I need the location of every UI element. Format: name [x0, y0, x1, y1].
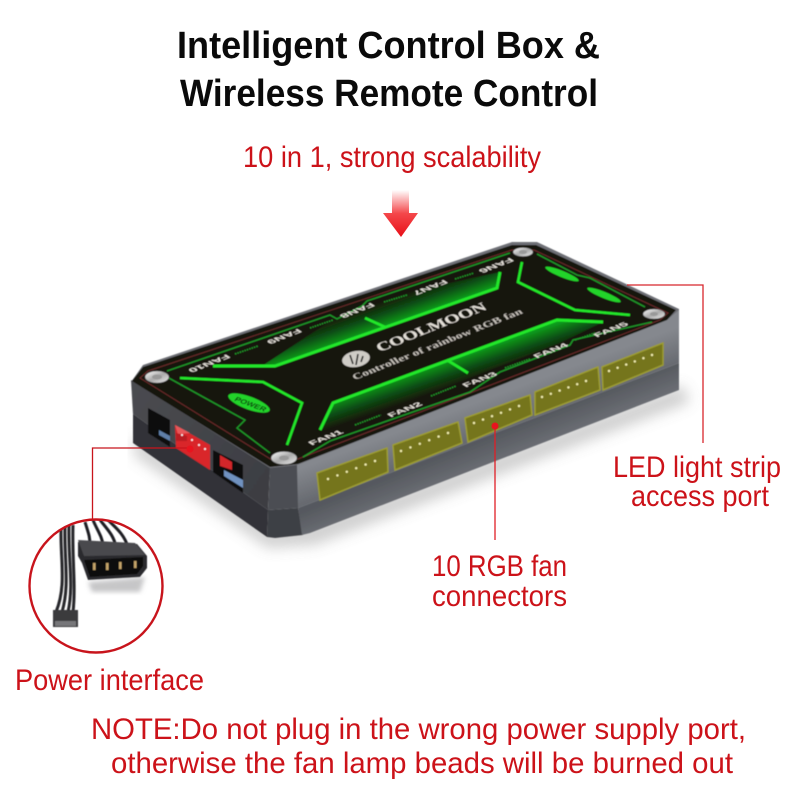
callout line: RGB fan connectors: [492, 422, 498, 540]
device front face: [297, 310, 679, 535]
green pill: POWER: [226, 389, 272, 417]
green pill: POWER: POWER: [233, 396, 269, 413]
molex connector: [78, 540, 147, 580]
callout label: Power interface: Power interface: [15, 664, 204, 697]
arrow: down to control box: [383, 190, 418, 237]
device top panel: [132, 245, 676, 467]
title: [177, 25, 600, 115]
fan labels top row: FAN7: [410, 279, 450, 296]
port: red power connector: [175, 425, 210, 470]
title: Wireless Remote Control: [180, 73, 598, 115]
screw: bottom: [271, 452, 297, 464]
callout label: 10 RGB fan connectors: [432, 550, 567, 613]
fan labels bottom row: FAN4: [531, 342, 572, 359]
subtitle: 10 in 1, strong scalability: 10 in 1, strong scalability: [243, 141, 541, 174]
port: black USB socket left: [148, 408, 170, 447]
fan labels top row: FAN10: [186, 353, 232, 373]
control box device: [131, 242, 690, 548]
connector 5: [602, 343, 663, 390]
bright green circuit lines: [180, 262, 630, 445]
callout label: 10 RGB fan connectors: 10 RGB fan: [432, 550, 567, 583]
small white plug: [53, 610, 78, 627]
fan labels bottom row: FAN5: [591, 321, 631, 338]
screw: top: [513, 248, 533, 256]
brand name: COOLMOON: COOLMOON: [372, 300, 490, 355]
thin green outline: [167, 253, 652, 457]
connector 3: [465, 395, 532, 442]
dashed connector marks: [235, 273, 595, 425]
molex wires: [85, 520, 128, 547]
device left face: [131, 380, 303, 538]
callout line: LED strip port: [627, 285, 703, 443]
fan labels bottom row: FAN1: [306, 429, 346, 446]
connector 2: [393, 422, 462, 470]
brand logo: [341, 349, 371, 369]
green pill: LED 1: [544, 264, 580, 284]
device body top bevel: [131, 242, 679, 475]
fan labels top row: FAN9: [264, 328, 304, 345]
connector pins: [327, 354, 653, 480]
callout label: LED light strip access port: access port: [631, 480, 770, 513]
fan connectors row: [317, 343, 663, 500]
fan labels bottom row: FAN3: [460, 371, 500, 388]
screw: left: [145, 371, 169, 383]
connector 4: [535, 367, 600, 415]
product caption: Controller of rainbow RGB fan: [350, 307, 526, 382]
fan labels bottom row: FAN2: [385, 401, 425, 418]
callout label: LED light strip access port: [613, 451, 781, 513]
screw: right: [643, 309, 665, 319]
callout label: LED light strip access port: LED light strip: [613, 451, 781, 484]
green pill: LED 2: [586, 285, 622, 305]
fan labels bottom row: [306, 321, 631, 446]
green glow panels: [262, 272, 500, 366]
connector 1: [317, 448, 388, 500]
device drop shadow: [134, 385, 690, 548]
callout label: 10 RGB fan connectors: connectors: [432, 580, 567, 613]
warning note: otherwise the fan lamp beads will be burned out: [111, 747, 734, 780]
fan labels top row: FAN6: [476, 257, 516, 274]
callout line: power port: [92, 446, 194, 520]
molex connector shadow: [88, 577, 145, 592]
port: black USB socket right: [213, 450, 243, 493]
title: Intelligent Control Box &: [177, 25, 600, 67]
warning note: [91, 713, 746, 780]
fan labels top row: [186, 257, 516, 373]
inset: power cable circle: [30, 520, 162, 652]
warning note: NOTE:Do not plug in the wrong power supply port,: [91, 713, 746, 746]
cable bundle: [56, 525, 74, 612]
fan labels top row: FAN8: [337, 302, 377, 319]
